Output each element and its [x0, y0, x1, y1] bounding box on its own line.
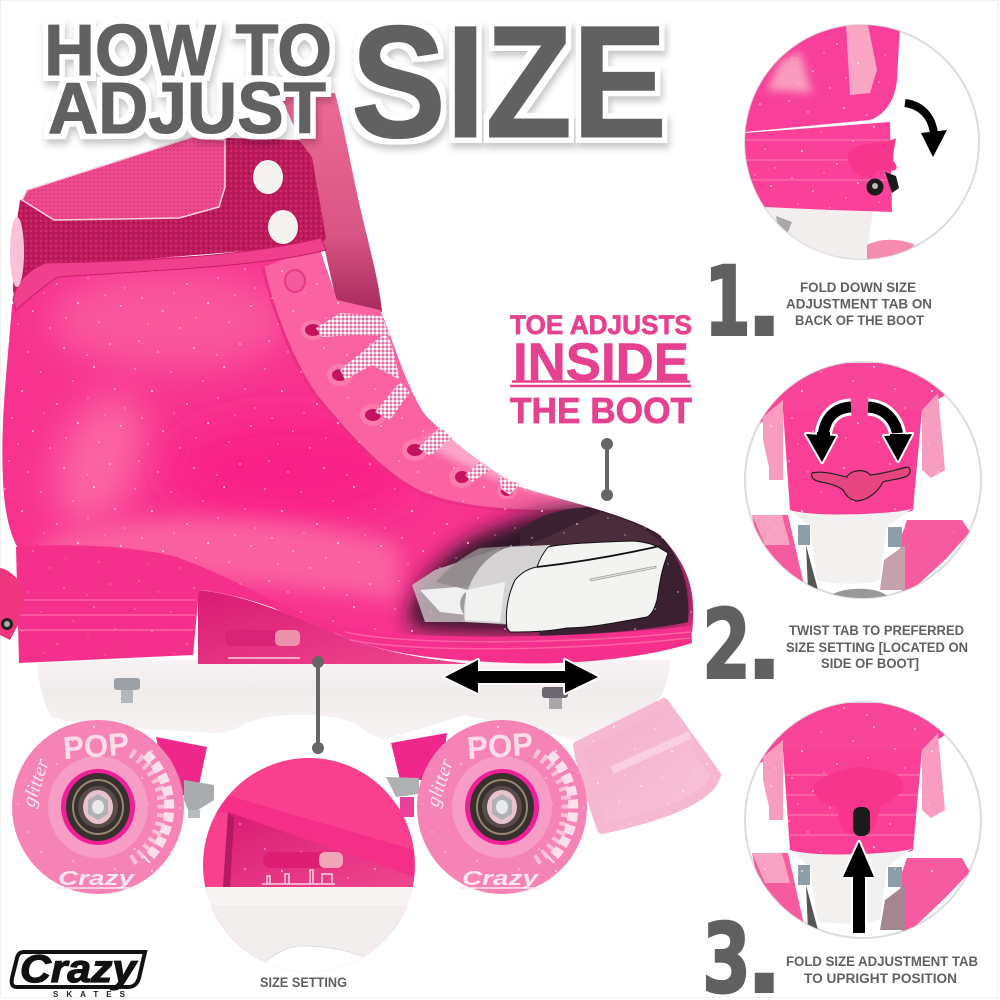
mesh lining [22, 137, 225, 220]
tab slot [853, 807, 870, 836]
lace panel [263, 240, 590, 511]
wheel branding: POP [466, 726, 534, 766]
step number: . [746, 589, 782, 701]
pointer to size setting [312, 656, 324, 754]
left wheel: glitter [18, 756, 54, 810]
see-through toe window [409, 506, 689, 633]
wheel branding: POP [62, 726, 130, 766]
panel: size setting detail circle [200, 755, 420, 990]
step caption: SIDE OF BOOT] [821, 656, 919, 671]
logo wordmark: Crazy [20, 948, 139, 991]
callout: toe adjusts inside the boot [510, 310, 692, 431]
panel: step 3 [702, 702, 985, 1000]
circle outline [745, 362, 981, 598]
adjustment tab upright [813, 767, 904, 835]
step caption: TO UPRIGHT POSITION [804, 971, 957, 986]
title: ADJUST [48, 69, 326, 149]
glitter [0, 250, 700, 640]
right wheel: Crazy [462, 868, 539, 890]
collar badge [10, 217, 24, 287]
step number: 1 [704, 246, 751, 358]
white base plate [37, 660, 670, 740]
toe stop [573, 697, 722, 835]
step caption [786, 954, 978, 986]
right wheel: glitter [422, 756, 458, 810]
title [44, 0, 667, 171]
boot tongue behind cuff [281, 93, 382, 312]
left wheel [12, 720, 184, 894]
title: HOW TO [44, 11, 332, 91]
wheel hub [61, 769, 135, 845]
collar hem [13, 238, 326, 310]
callout emphasis word: INSIDE [513, 333, 689, 392]
skate illustration [0, 93, 722, 894]
plate bolts [114, 678, 568, 709]
white eyelets [253, 160, 283, 194]
step caption: BACK OF THE BOOT [795, 313, 925, 328]
upper eyelet [285, 270, 305, 292]
step number: 2 [702, 589, 751, 701]
circle outline [745, 25, 979, 259]
boot body [0, 240, 700, 644]
left wheel: Crazy [58, 868, 135, 890]
padded collar [10, 137, 326, 310]
step caption [786, 280, 932, 328]
step caption: SIZE SETTING [LOCATED ON [786, 640, 968, 655]
step caption: ADJUSTMENT TAB ON [786, 296, 932, 312]
step caption: TWIST TAB TO PREFERRED [789, 623, 964, 638]
rear adjustment tab [0, 568, 24, 640]
arrow: fold down [905, 103, 947, 157]
back view of boot [752, 703, 970, 932]
callout line one: TOE ADJUSTS [510, 310, 692, 340]
trucks [156, 733, 447, 818]
right wheel [417, 720, 587, 894]
logo subline: SKATES [53, 990, 126, 999]
logo: Crazy Skates [12, 948, 145, 999]
back view of boot [752, 363, 970, 598]
arrows: twist directions [806, 407, 912, 462]
panel: step 1 [704, 25, 979, 358]
panel: step 2 [702, 362, 985, 701]
callout underline [510, 382, 691, 386]
adjustment tab [812, 467, 910, 501]
callout line three: THE BOOT [510, 390, 692, 431]
callout pointer to toe [601, 438, 613, 501]
illustrated toe sliding inside boot [412, 541, 668, 632]
rear view of boot [745, 25, 915, 260]
wheel hub [465, 769, 539, 845]
step caption: FOLD SIZE ADJUSTMENT TAB [786, 954, 978, 969]
laces and eyelets [301, 313, 520, 499]
size setting label: SIZE SETTING [260, 975, 347, 990]
double arrow: toe movement [445, 660, 598, 693]
step caption: FOLD DOWN SIZE [800, 280, 916, 295]
sliding size indicator [225, 630, 300, 646]
sole and heel [0, 545, 692, 665]
arrow: fold up [843, 842, 874, 933]
circle outline [745, 702, 981, 938]
step number: . [746, 246, 782, 358]
step caption [786, 623, 968, 671]
